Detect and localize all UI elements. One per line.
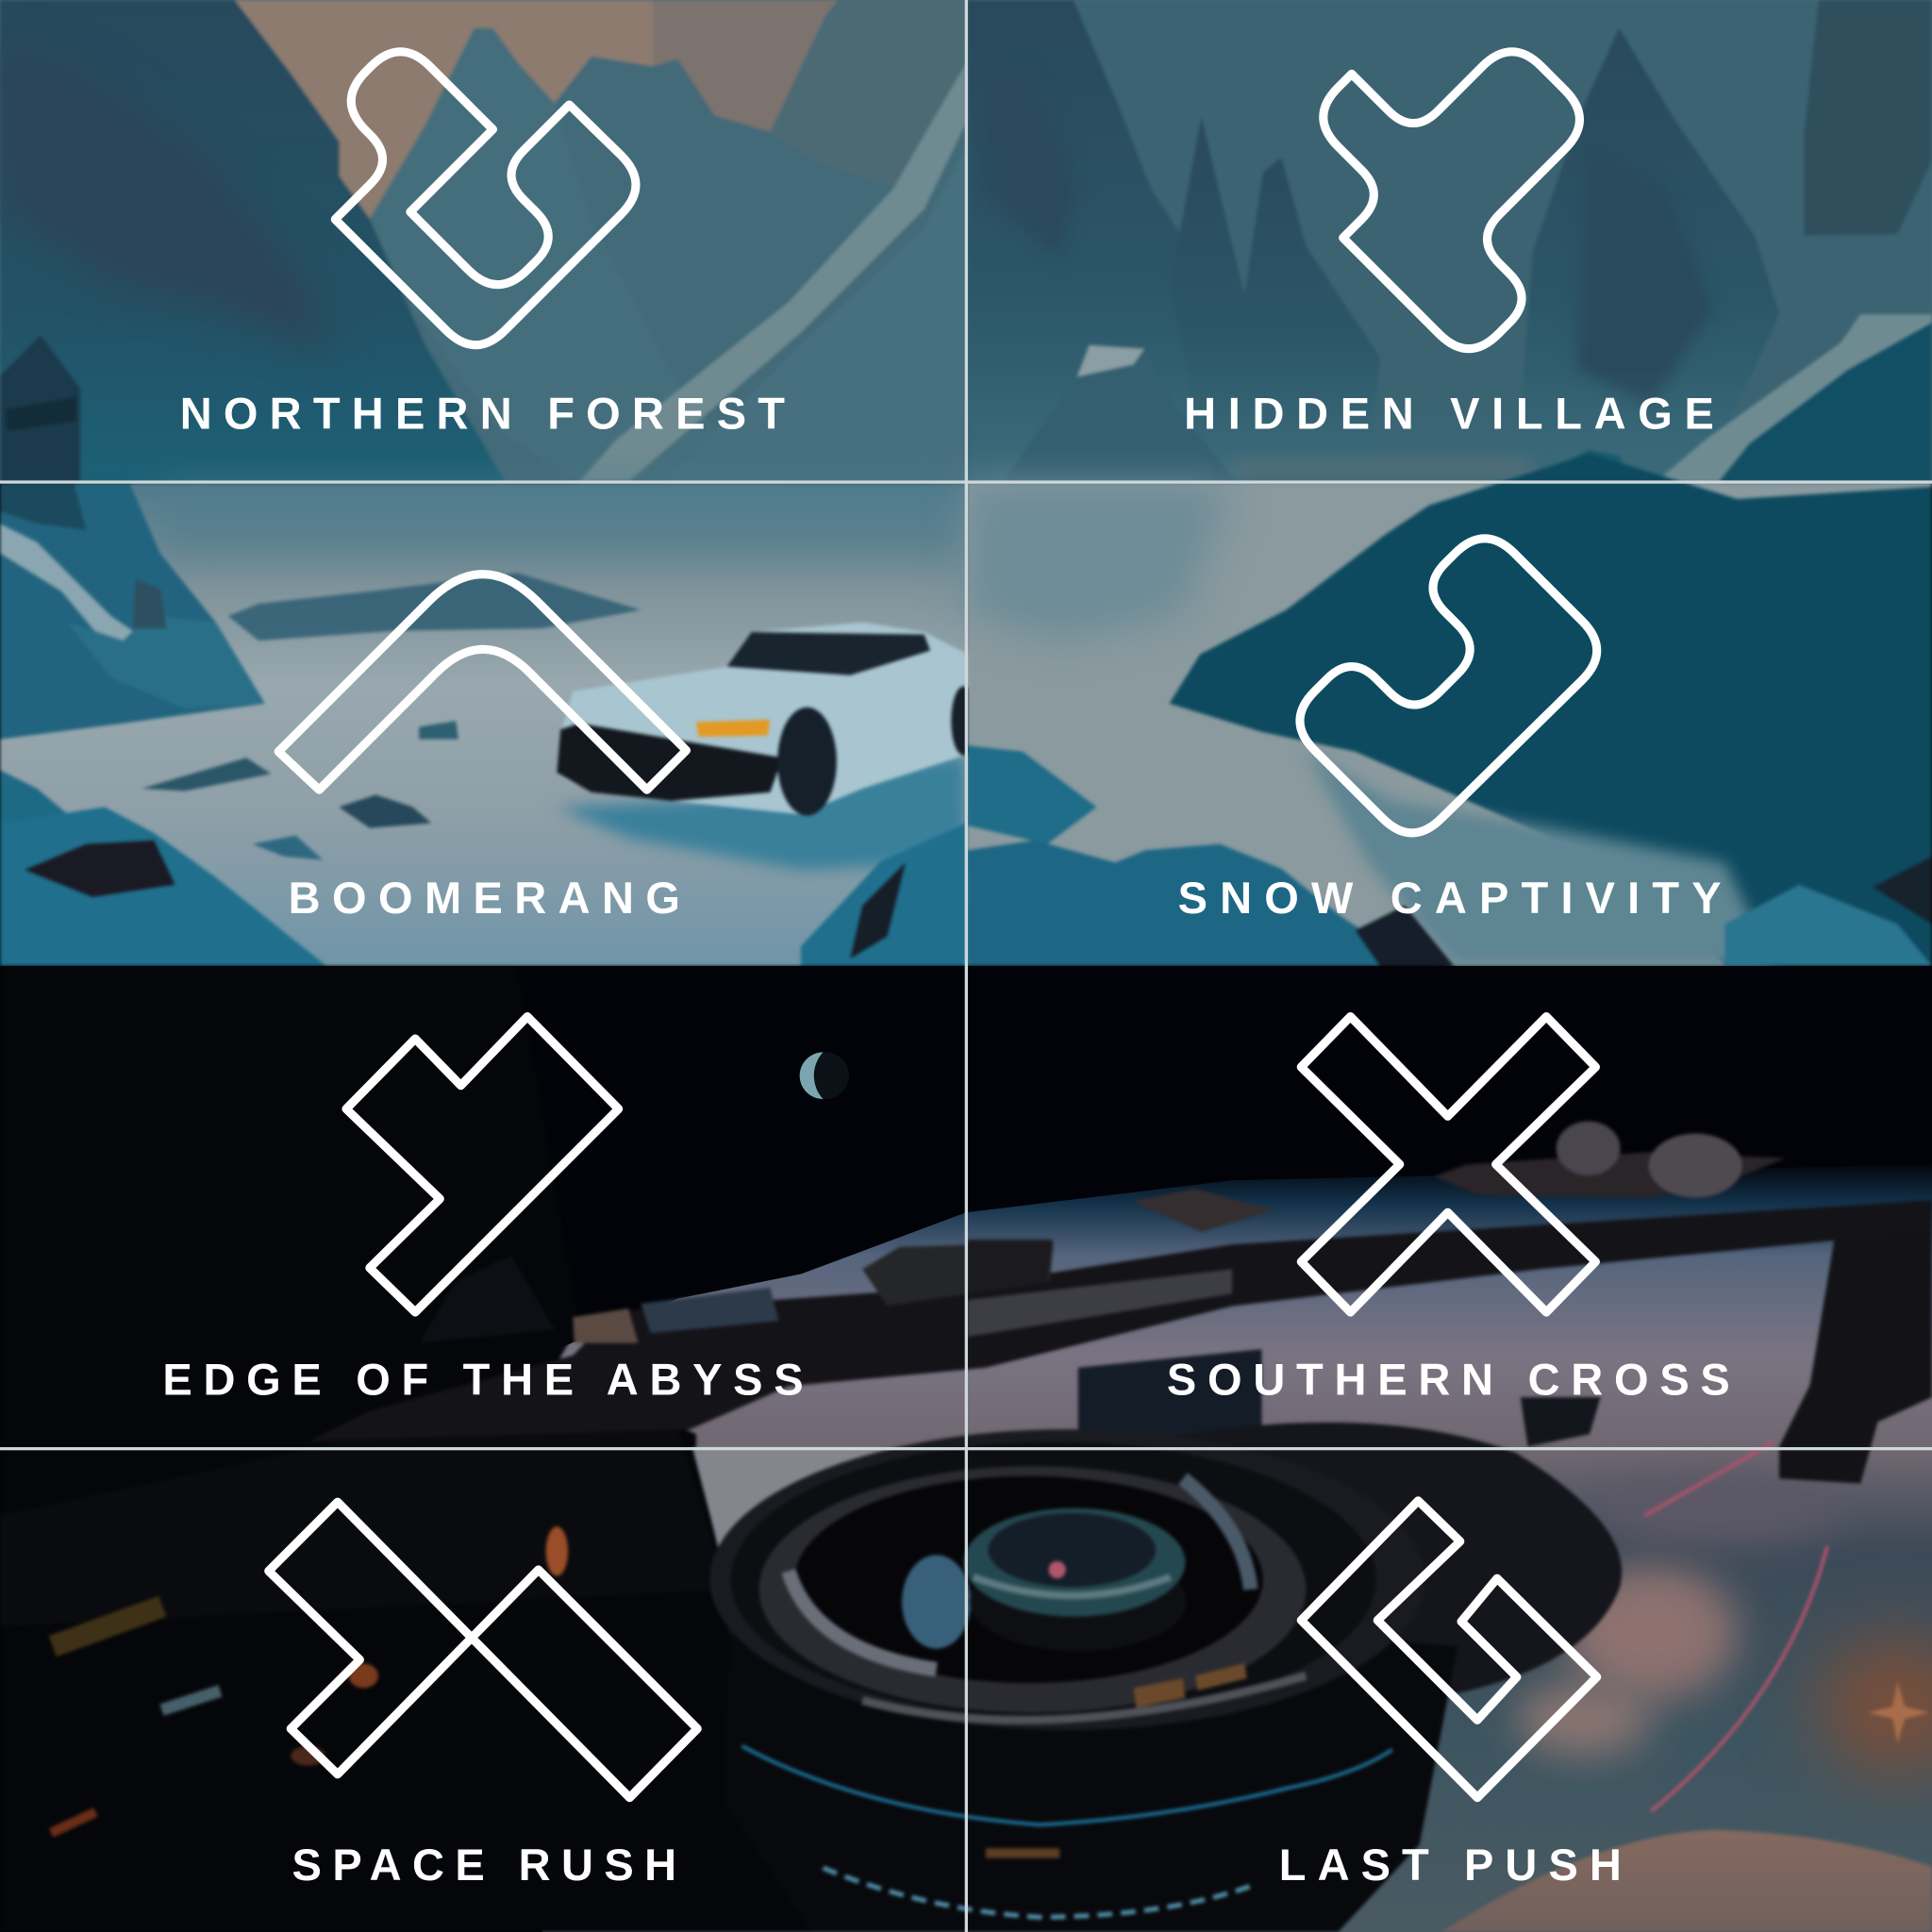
icon: Last Push track: [1301, 1501, 1597, 1798]
panel: Hidden Village: [967, 0, 1932, 480]
icon: Snow Captivity track: [1300, 539, 1597, 833]
car: [557, 623, 983, 870]
icon: Edge of the Abyss track: [346, 1017, 619, 1312]
panel: Last Push: [967, 1450, 1932, 1932]
panel: Southern Cross: [967, 966, 1932, 1446]
icon: Boomerang track: [278, 575, 687, 790]
title: Hidden Village: HIDDEN VILLAGE: [1184, 389, 1714, 439]
title: Last Push: LAST PUSH: [1279, 1840, 1622, 1890]
icon: Southern Cross track: [1301, 1017, 1595, 1312]
title: Boomerang: BOOMERANG: [289, 873, 680, 923]
panel: Snow Captivity: [967, 484, 1932, 966]
icon: Hidden Village track: [1324, 52, 1579, 349]
panel: Northern Forest: [0, 0, 965, 480]
background: space station scene: [0, 966, 1932, 1932]
panel: Space Rush: [0, 1450, 965, 1932]
panel: Boomerang: [0, 484, 965, 966]
moon: [800, 1052, 849, 1099]
title: Space Rush: SPACE RUSH: [292, 1840, 676, 1890]
title: Southern Cross: SOUTHERN CROSS: [1167, 1355, 1730, 1405]
background: snowy mountains scene: [0, 0, 1932, 966]
panel: Edge of the Abyss: [0, 966, 965, 1446]
icon: Northern Forest track: [335, 52, 636, 345]
title: Edge of the Abyss: EDGE OF THE ABYSS: [162, 1355, 804, 1405]
icon: Space Rush track: [269, 1502, 697, 1798]
title: Snow Captivity: SNOW CAPTIVITY: [1178, 873, 1722, 923]
title: Northern Forest: NORTHERN FOREST: [180, 389, 785, 439]
